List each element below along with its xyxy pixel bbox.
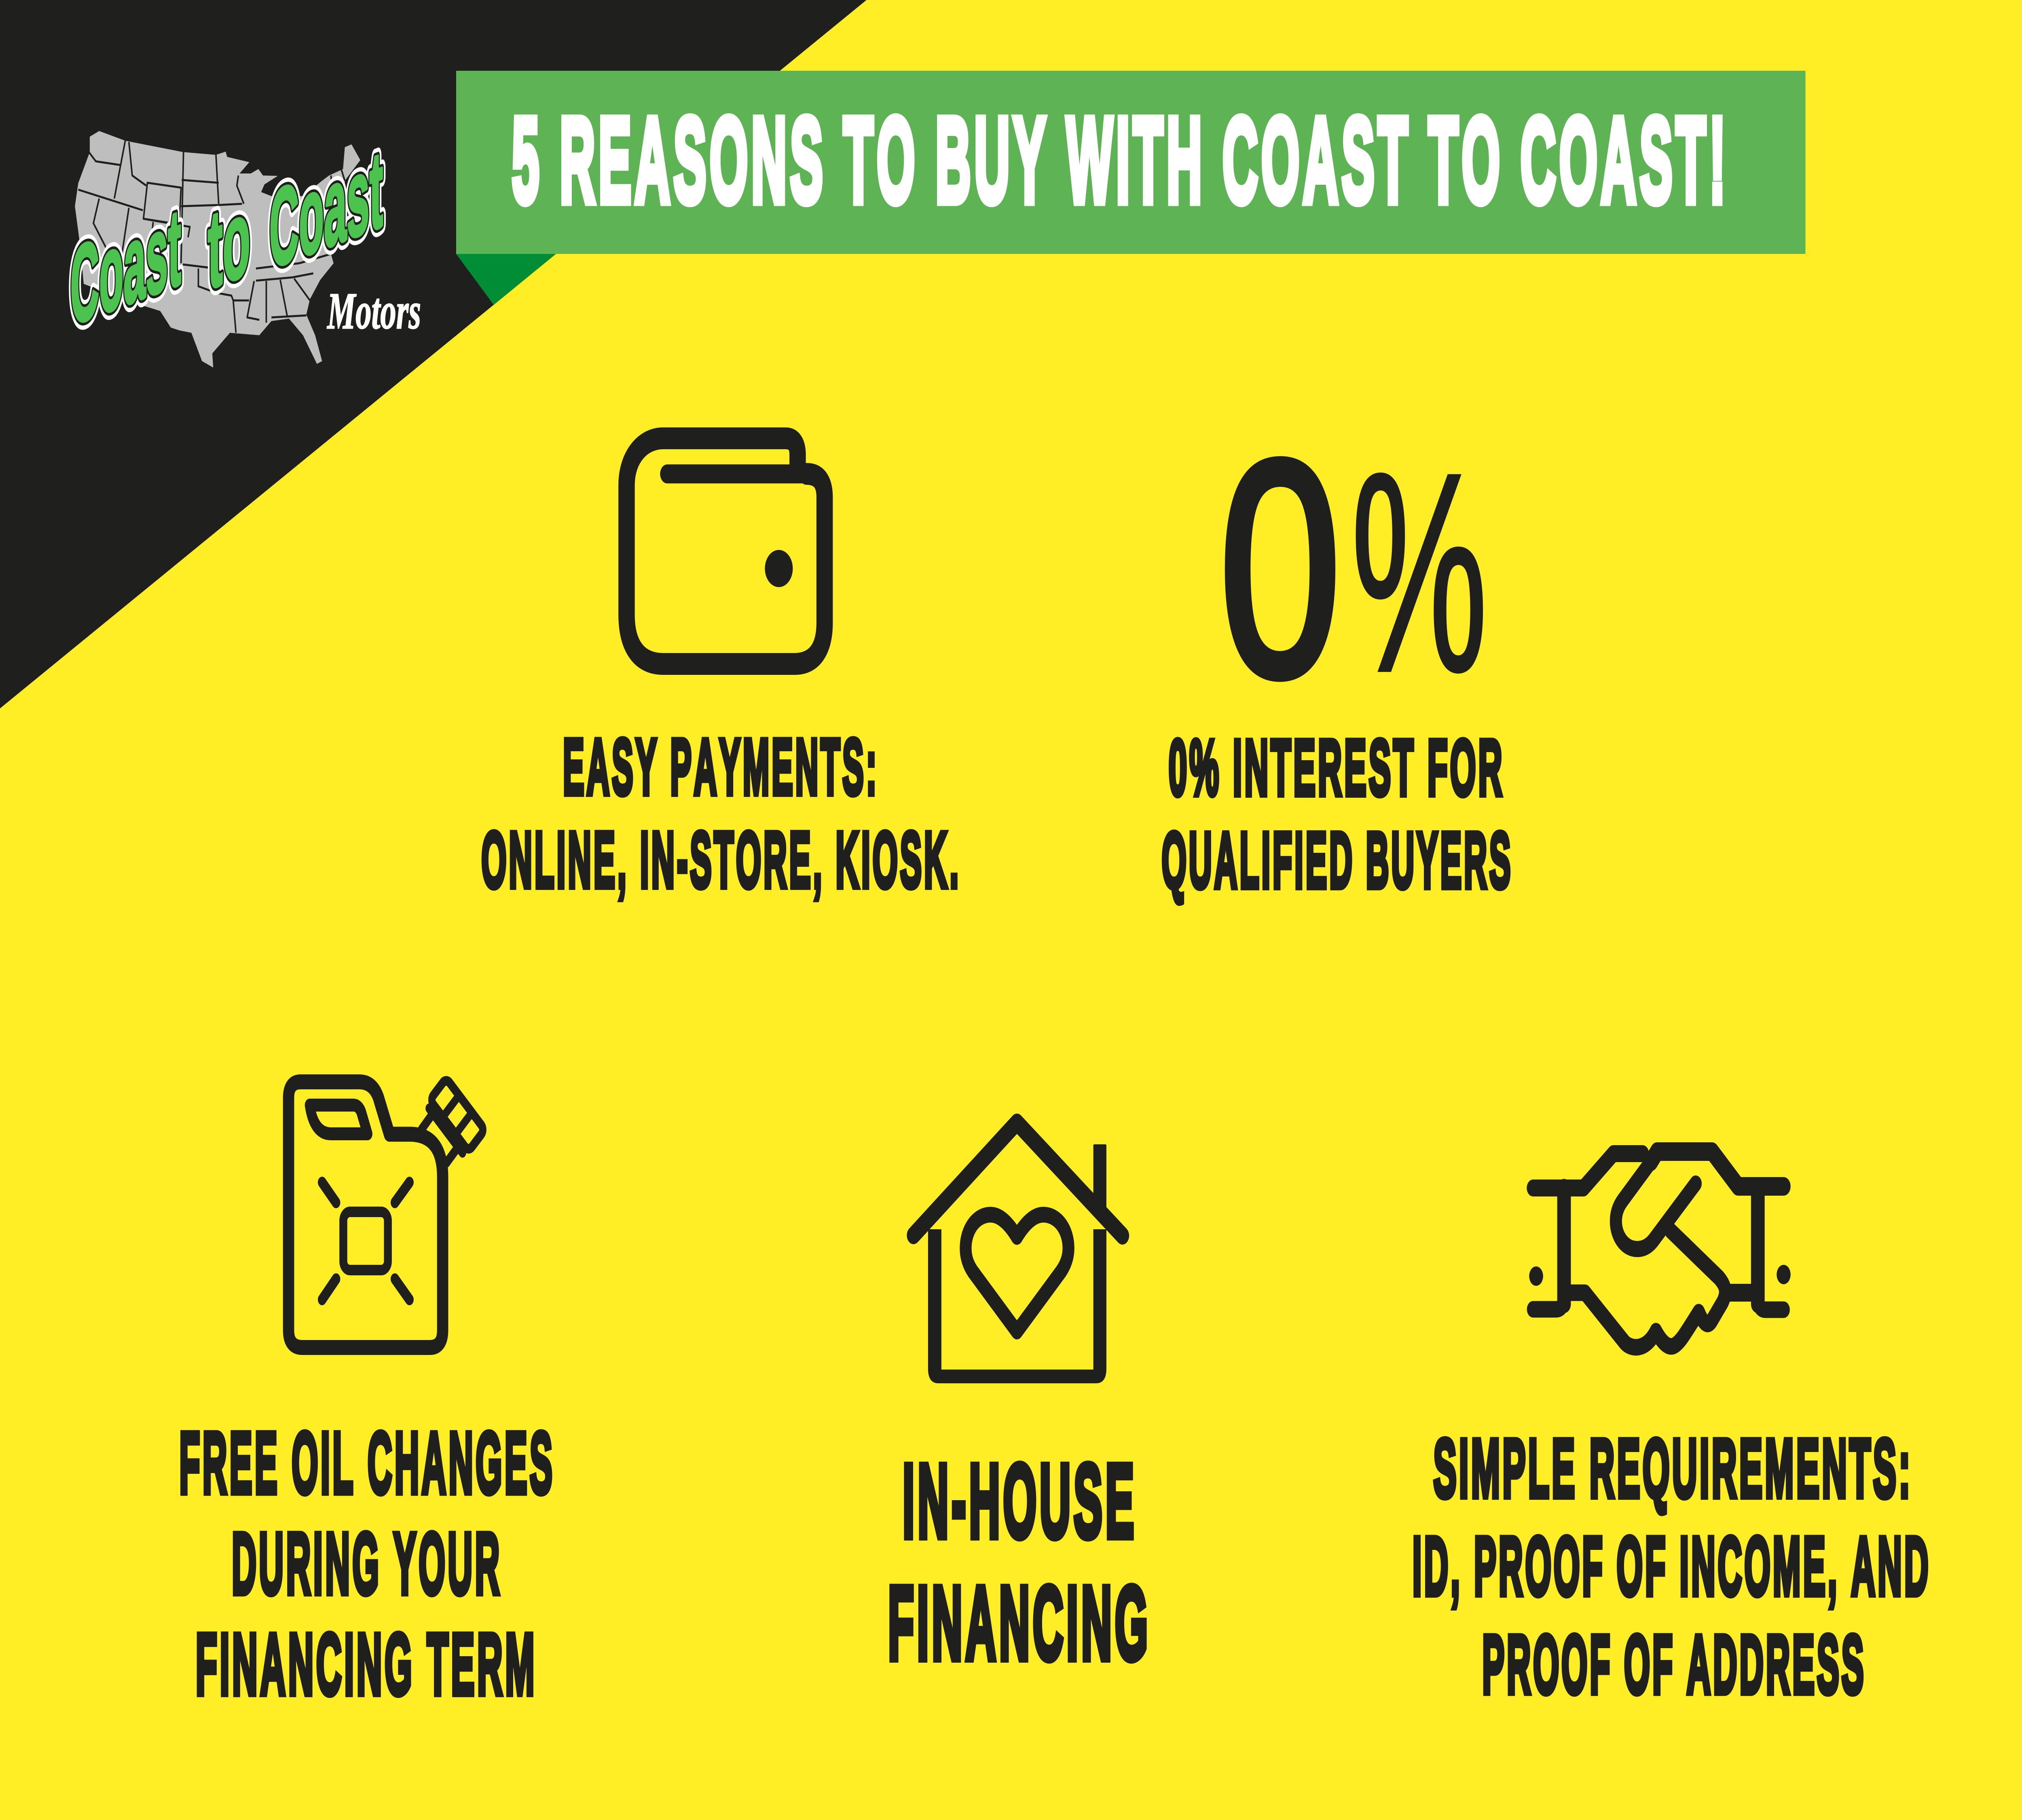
text: simple requirements: ID, PROOF OF INCOME, AND <box>1413 1520 1931 1613</box>
icon: jerry can <box>289 1078 485 1347</box>
logo wordmark white outline: Coast <box>269 127 383 292</box>
icon: house with heart <box>914 1122 1123 1383</box>
logo wordmark <box>70 127 383 349</box>
panel: in-house financing <box>888 1122 1151 1681</box>
logo wordmark: to <box>208 175 250 313</box>
text: simple requirements: PROOF OF ADDRESS <box>1482 1619 1866 1711</box>
logo wordmark white outline: to <box>208 175 250 313</box>
logo wordmark black outline: Coast <box>269 127 383 292</box>
text: easy payments: EASY PAYMENTS: <box>563 723 879 811</box>
text: zero interest: QUALIFIED BUYERS <box>1161 816 1513 905</box>
logo wordmark black outline <box>70 127 383 349</box>
panel: zero percent <box>1161 397 1513 905</box>
logo wordmark: Coast <box>269 127 383 292</box>
logo: Coast to Coast Motors <box>70 127 421 368</box>
banner fold <box>456 254 556 305</box>
text: free oil changes: FREE OIL CHANGES <box>179 1414 555 1511</box>
text: in-house financing: IN-HOUSE <box>903 1442 1137 1559</box>
panel: simple requirements <box>1413 1152 1931 1711</box>
black corner triangle <box>0 0 867 708</box>
figure: 0%: % <box>1351 414 1488 731</box>
text: zero interest: 0% INTEREST FOR <box>1169 723 1504 812</box>
logo wordmark white outline: Coast <box>70 185 181 349</box>
text: free oil changes: DURING YOUR <box>232 1515 502 1612</box>
figure: 0%: 0 <box>1220 397 1341 740</box>
figure: 0% <box>1220 397 1488 740</box>
US map <box>75 131 360 368</box>
text: simple requirements: SIMPLE REQUIREMENTS: <box>1433 1423 1913 1515</box>
logo wordmark white outline <box>70 127 383 349</box>
text: in-house financing: FINANCING <box>888 1565 1151 1681</box>
text: free oil changes <box>179 1414 555 1713</box>
text: zero interest <box>1161 723 1513 905</box>
text: easy payments: ONLINE, IN-STORE, KIOSK. <box>481 816 961 904</box>
title banner <box>456 71 1806 254</box>
text: in-house financing <box>888 1442 1151 1681</box>
icon: wallet <box>626 438 825 664</box>
text: free oil changes: FINANCING TERM <box>196 1615 537 1713</box>
icon: handshake <box>1529 1152 1791 1347</box>
logo wordmark black outline: to <box>208 175 250 313</box>
logo wordmark: Coast <box>70 185 181 349</box>
title: 5 REASONS TO BUY WITH COAST TO COAST! <box>512 93 1729 228</box>
panel: free oil changes <box>179 1078 555 1713</box>
text: easy payments <box>481 723 961 904</box>
text: simple requirements <box>1413 1423 1931 1711</box>
panel: easy payments <box>481 438 961 904</box>
logo: Motors: Motors <box>327 282 421 340</box>
logo wordmark black outline: Coast <box>70 185 181 349</box>
